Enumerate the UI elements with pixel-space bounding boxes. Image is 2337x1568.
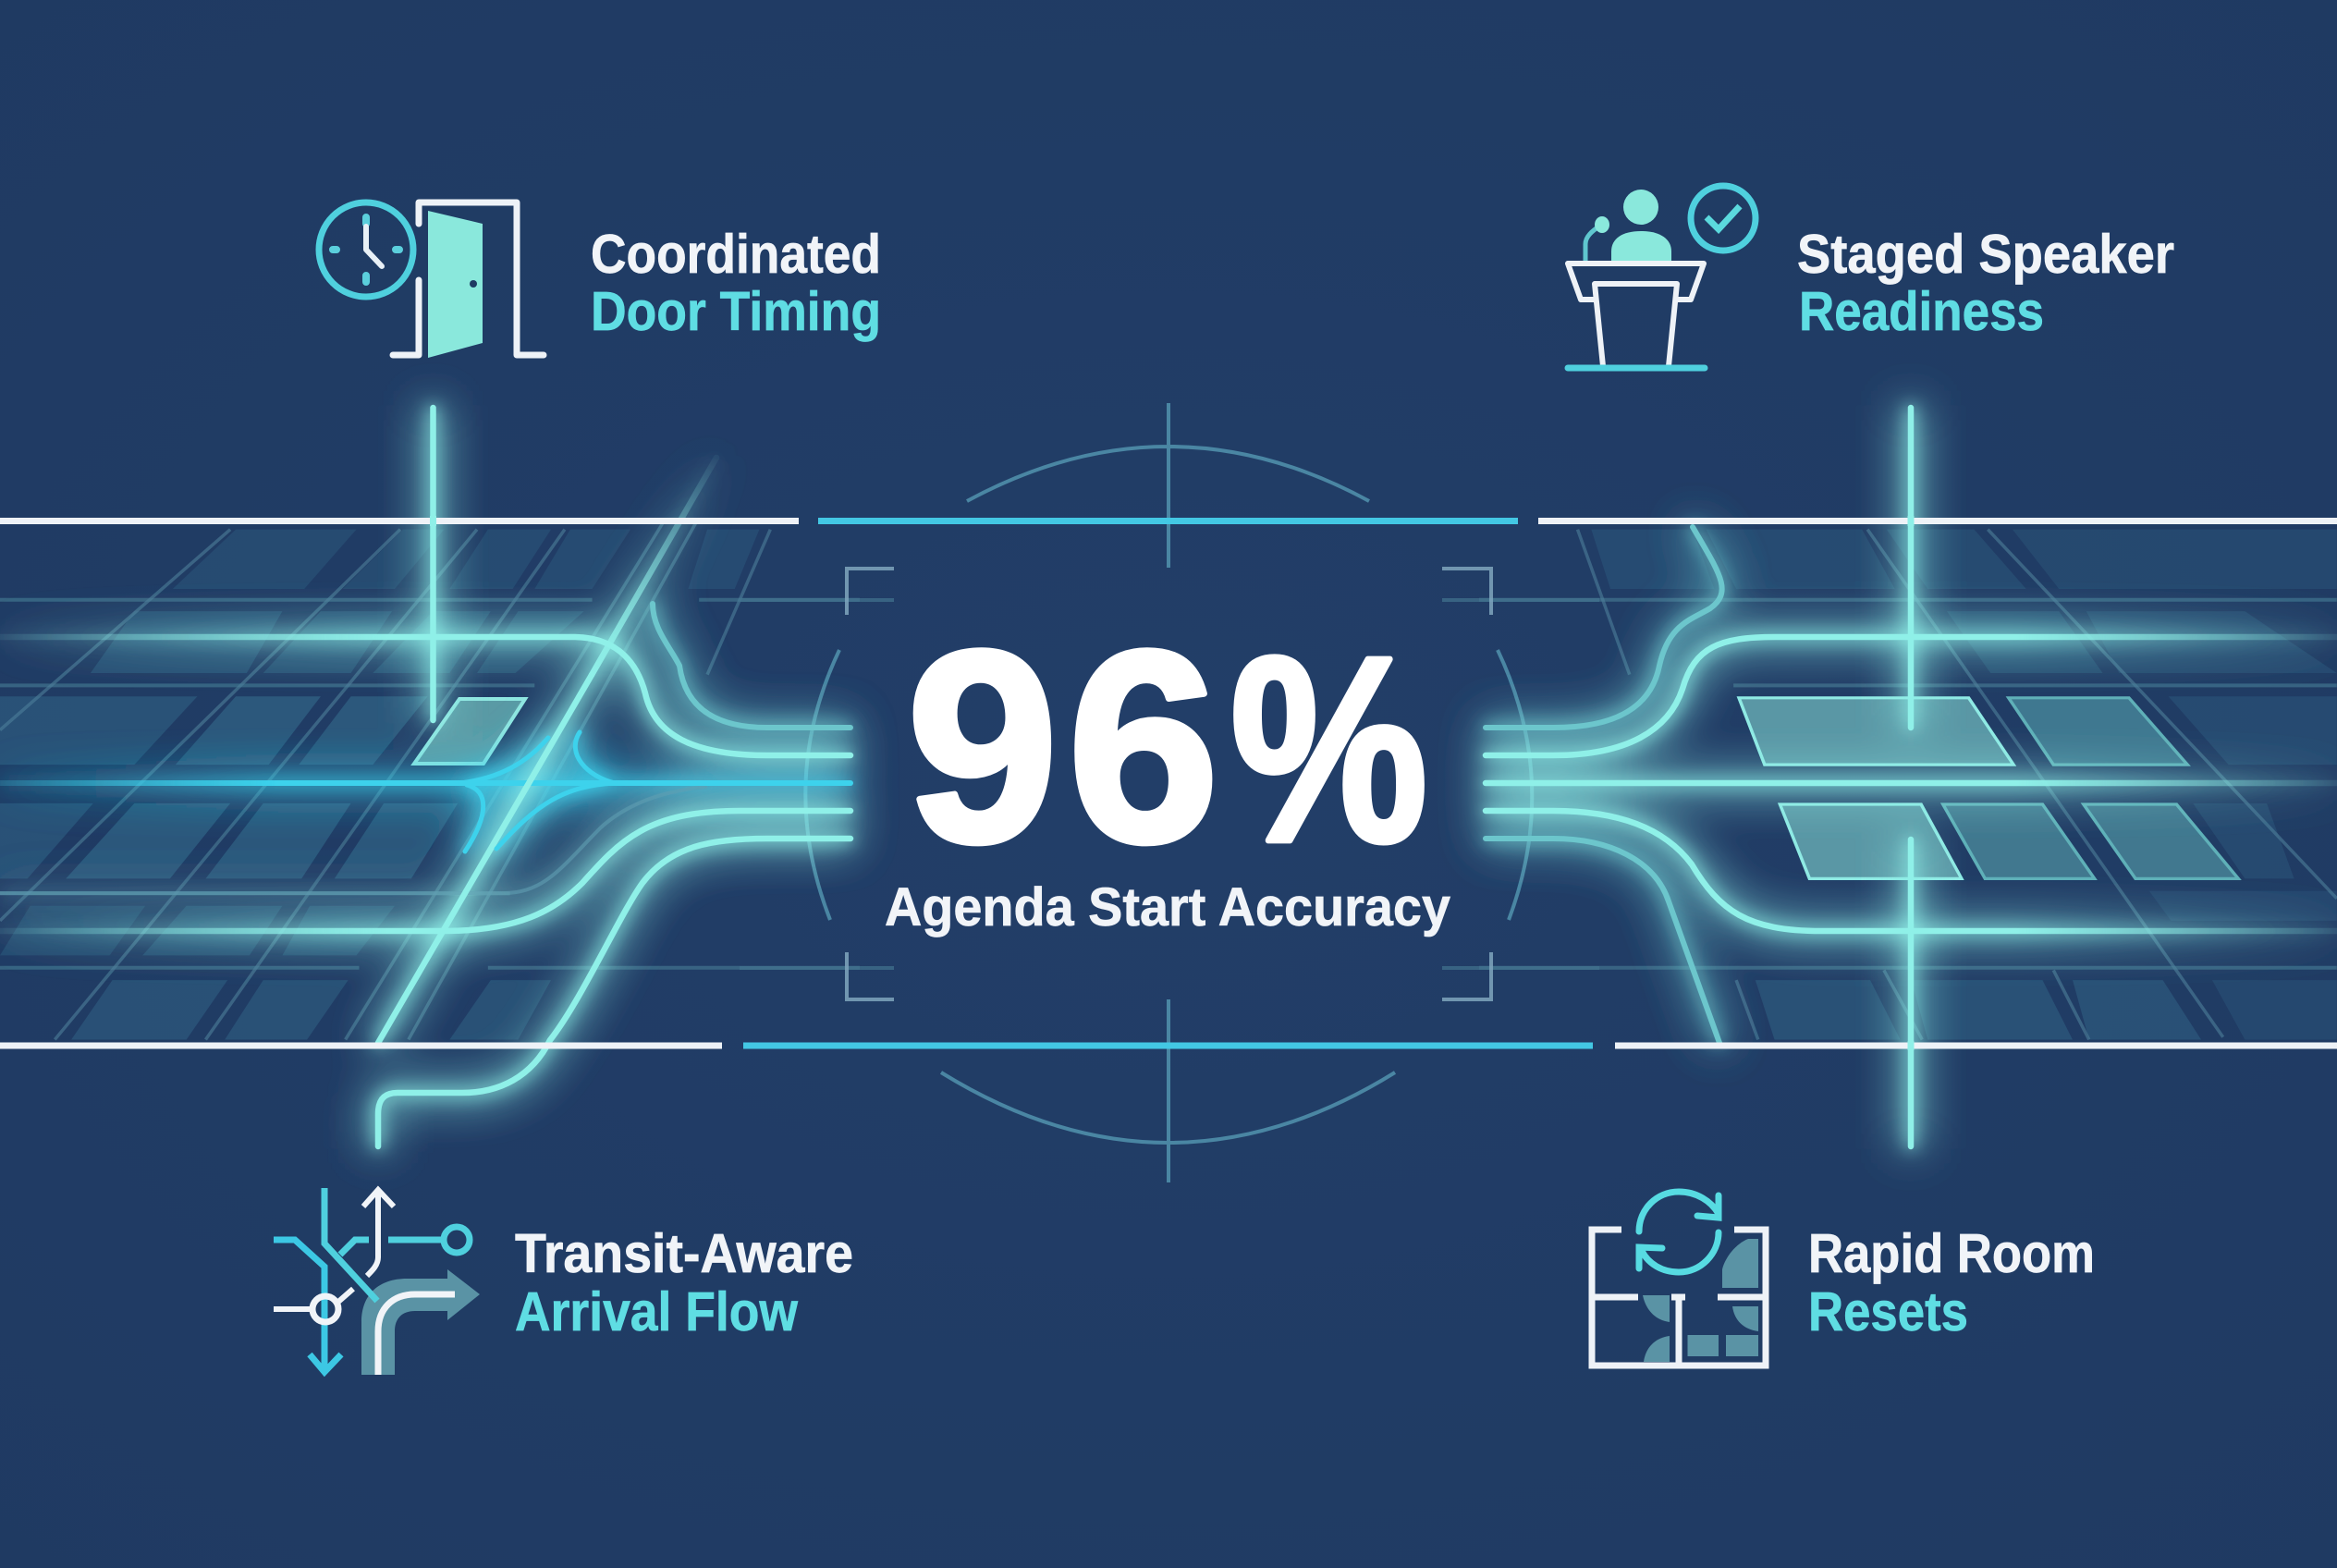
heading: Rapid Room Resets: Resets — [1808, 1281, 1968, 1342]
flow lines right — [1486, 408, 2337, 1146]
heading: Staged Speaker Readiness: Readiness — [1799, 281, 2044, 342]
heading: Transit-Aware Arrival Flow: Arrival Flow — [515, 1281, 798, 1342]
heading: Transit-Aware Arrival Flow — [515, 1223, 853, 1342]
heading: Rapid Room Resets — [1808, 1223, 2095, 1342]
left street grid — [0, 522, 860, 1039]
metric: 96%: % — [1230, 601, 1427, 897]
metric: 96% — [907, 595, 1427, 899]
venue block: left highlighted parcel — [414, 699, 525, 764]
flow lines left — [0, 408, 850, 1146]
heading: Staged Speaker Readiness — [1797, 224, 2174, 342]
metric: 96%: 6 — [1068, 595, 1219, 899]
HUD target around the metric — [740, 403, 1599, 1182]
icon: transit lines and arrival arrow — [274, 1188, 480, 1375]
icon: floor plan with refresh arrows — [1592, 1192, 1766, 1366]
right street grid — [1479, 530, 2337, 1039]
icon: clock and door — [319, 202, 544, 358]
metric caption: Agenda Start Accuracy — [885, 877, 1450, 937]
heading: Transit-Aware Arrival Flow: Transit-Aware — [515, 1223, 853, 1284]
heading: Staged Speaker Readiness: Staged Speaker — [1797, 224, 2174, 285]
heading: Coordinated Door Timing: Door Timing — [591, 281, 881, 342]
icon: speaker at podium with check — [1568, 186, 1756, 368]
heading: Coordinated Door Timing — [591, 224, 881, 342]
horizontal rails — [0, 516, 2337, 1050]
heading: Coordinated Door Timing: Coordinated — [591, 224, 881, 285]
venue blocks: right highlighted parcels — [1739, 698, 2238, 878]
metric: 96%: 9 — [907, 595, 1058, 899]
heading: Rapid Room Resets: Rapid Room — [1808, 1223, 2095, 1284]
